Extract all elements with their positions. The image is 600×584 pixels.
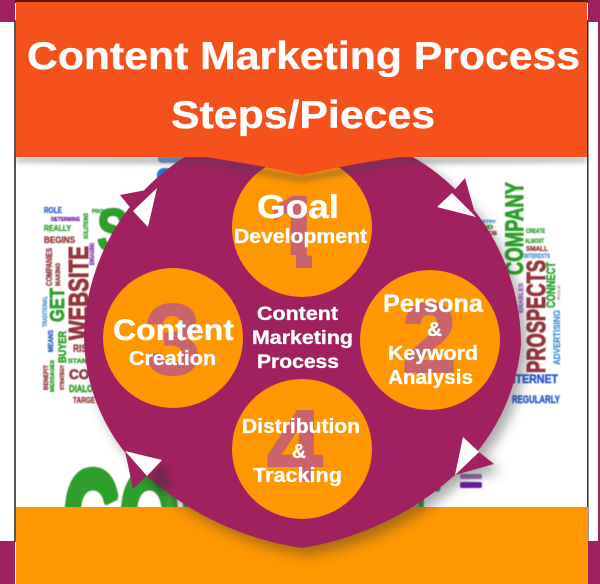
word cloud background: WEBSITE	[63, 246, 94, 340]
word cloud background: MAKING	[56, 263, 62, 286]
circle: step 1 goal development	[232, 157, 372, 297]
circle: step 4 distribution and tracking: Distribution	[242, 416, 360, 438]
circle: step 4 distribution and tracking: Tracking	[253, 465, 342, 487]
word cloud background: PROVIDES	[92, 209, 118, 215]
word cloud background: SMALL	[526, 244, 548, 253]
word cloud background: CONNECT	[544, 261, 558, 308]
word cloud background	[42, 157, 561, 507]
arrow: bottom left	[125, 451, 172, 492]
circle: step 3 content creation: Creation	[129, 348, 216, 370]
word cloud background: GET	[47, 288, 69, 322]
title	[27, 35, 580, 137]
center label: Content	[257, 304, 339, 325]
bottom orange band	[16, 507, 588, 584]
word cloud background: MEANS	[48, 330, 55, 352]
word cloud background: TARGET	[73, 396, 99, 405]
word cloud background: STAND	[68, 359, 93, 365]
circle: step 3 content creation	[103, 268, 243, 408]
arrow: top right	[437, 178, 476, 217]
word cloud background: GOOD	[470, 225, 494, 231]
word cloud background: ADVERTISING	[552, 310, 562, 365]
word cloud background: DETERMINE	[51, 217, 81, 223]
word cloud background: ROLE	[44, 206, 63, 215]
word cloud background: STRATEGY	[60, 364, 66, 390]
circle: step 2 persona and keyword analysis: 2	[402, 283, 457, 393]
circle: step 1 goal development: Development	[234, 226, 367, 248]
circle: step 2 persona and keyword analysis: Persona	[383, 290, 484, 318]
word cloud background: BENEFIT	[44, 365, 50, 390]
arrow: top left	[120, 188, 157, 227]
word cloud background: CON	[69, 366, 99, 382]
circle: step 1 goal development: 1	[268, 175, 325, 289]
word cloud background: INDUSTRY	[470, 219, 496, 224]
word cloud background: ROLE	[556, 285, 561, 300]
circle: step 2 persona and keyword analysis: Keyword	[388, 343, 478, 365]
circle: step 2 persona and keyword analysis: &	[427, 319, 442, 341]
circle: step 2 persona and keyword analysis	[360, 270, 500, 410]
header banner	[15, 0, 588, 175]
word cloud background: SALES	[470, 231, 498, 237]
word cloud background: REGULARLY	[512, 394, 560, 406]
title: Steps/Pieces	[171, 94, 435, 137]
main purple shape shadow	[90, 155, 527, 555]
word cloud background: PROSPECTS	[521, 260, 551, 373]
circle: step 3 content creation: Content	[113, 314, 234, 347]
circle: step 3 content creation: 3	[145, 284, 201, 396]
word cloud background: INTERNET	[505, 372, 559, 386]
word cloud background: CREATE	[526, 229, 545, 235]
word cloud background: SOLUTIONS	[84, 213, 90, 239]
word cloud background: ENGAGING	[90, 243, 96, 265]
circle: step 4 distribution and tracking	[232, 379, 372, 519]
circle: step 2 persona and keyword analysis: Analysis	[388, 367, 473, 389]
word cloud background: DIALOG	[69, 384, 99, 395]
word cloud background: BUYER	[57, 331, 69, 363]
word cloud background: ALMOST	[525, 238, 544, 245]
panel: purple process wheel	[84, 148, 521, 548]
arrow: bottom right	[455, 437, 494, 475]
header shadow	[16, 157, 587, 182]
center label: Marketing	[252, 328, 353, 349]
word cloud background: BEGINS	[44, 235, 75, 245]
word cloud background: ENABLES	[519, 283, 525, 313]
word cloud background: TRADITIONAL	[43, 296, 49, 327]
word cloud background: MESSAGES	[50, 359, 56, 392]
word cloud background: REALLY	[44, 224, 72, 233]
circle: step 1 goal development: Goal	[257, 188, 339, 225]
word cloud background: COMPANY	[501, 182, 529, 275]
title: Content Marketing Process	[27, 35, 580, 78]
center label	[252, 304, 353, 373]
center label: Process	[257, 352, 339, 373]
circle: step 4 distribution and tracking: &	[292, 441, 306, 463]
circle: step 4 distribution and tracking: 4	[267, 390, 323, 502]
word cloud background: COMPANIES	[45, 247, 54, 286]
word cloud background: S	[97, 197, 129, 264]
word cloud background: INTERESTS	[524, 254, 550, 260]
word cloud background: RISK	[73, 343, 93, 355]
